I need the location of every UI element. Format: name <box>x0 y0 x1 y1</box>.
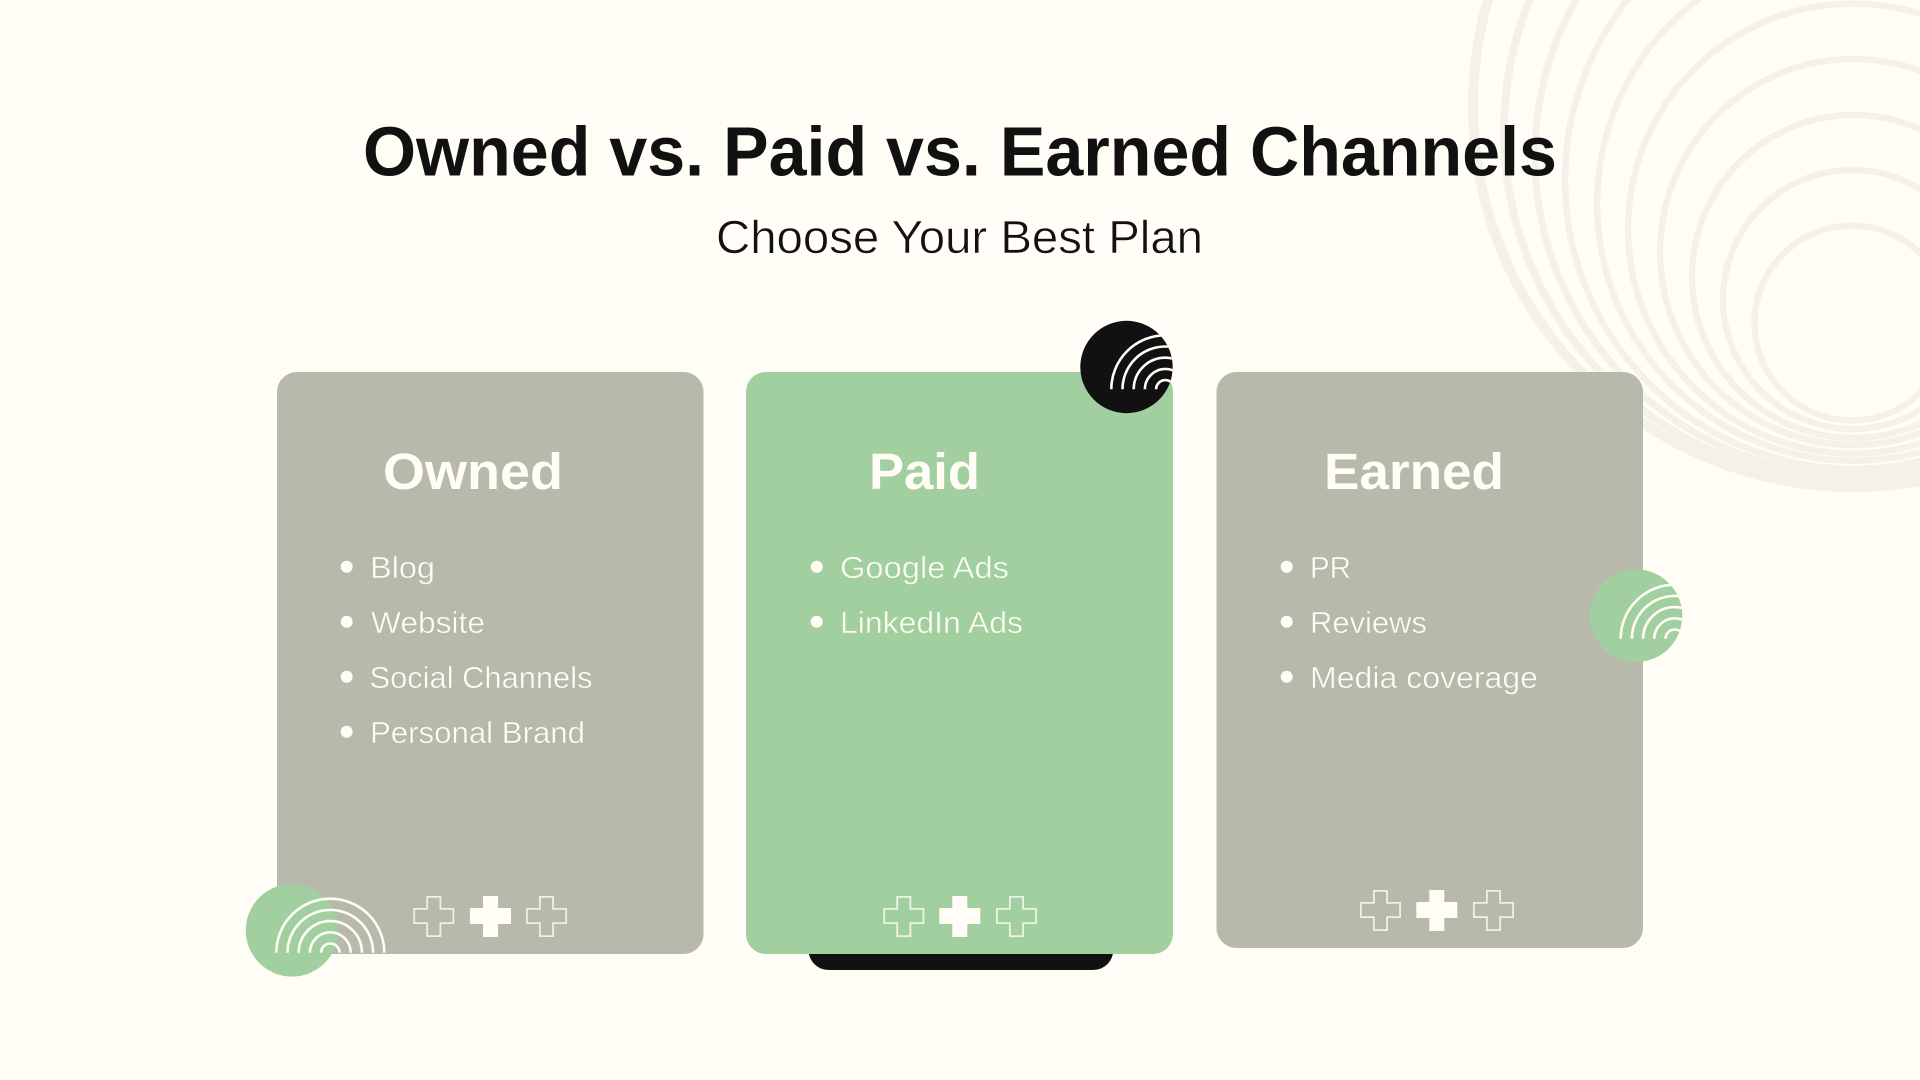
list: paid channels: Google Ads <box>840 550 1009 585</box>
heading: paid: Paid <box>869 443 980 500</box>
black tab under paid panel <box>808 945 1113 970</box>
subtitle: Choose Your Best Plan <box>716 211 1203 263</box>
title: Owned vs. Paid vs. Earned Channels <box>363 112 1557 190</box>
list: paid channels: LinkedIn Ads <box>840 605 1023 640</box>
list: earned channels: PR <box>1310 550 1351 585</box>
decorative concentric rings <box>1473 0 1920 487</box>
list: owned channels: Personal Brand <box>370 715 585 750</box>
list: owned channels: Social Channels <box>370 660 592 695</box>
list: owned channels: Website <box>371 605 485 640</box>
list: earned channels: Media coverage <box>1310 660 1538 695</box>
heading: owned: Owned <box>383 443 563 500</box>
list: owned channels <box>341 550 592 750</box>
icon: three plus signs <box>414 896 566 937</box>
heading: earned: Earned <box>1324 443 1504 500</box>
panel: owned <box>246 372 703 977</box>
list: earned channels: Reviews <box>1310 605 1427 640</box>
list: earned channels <box>1281 550 1538 695</box>
icon: green circle with rainbow arcs <box>246 884 384 977</box>
list: paid channels <box>811 550 1023 640</box>
icon: three plus signs <box>884 896 1036 937</box>
list: owned channels: Blog <box>370 550 435 585</box>
panel: earned <box>1216 372 1729 948</box>
icon: three plus signs <box>1361 890 1513 931</box>
icon: green circle with rainbow arcs <box>1590 570 1682 662</box>
panel: paid <box>746 321 1219 954</box>
icon: black circle with rainbow arcs <box>1080 320 1173 414</box>
